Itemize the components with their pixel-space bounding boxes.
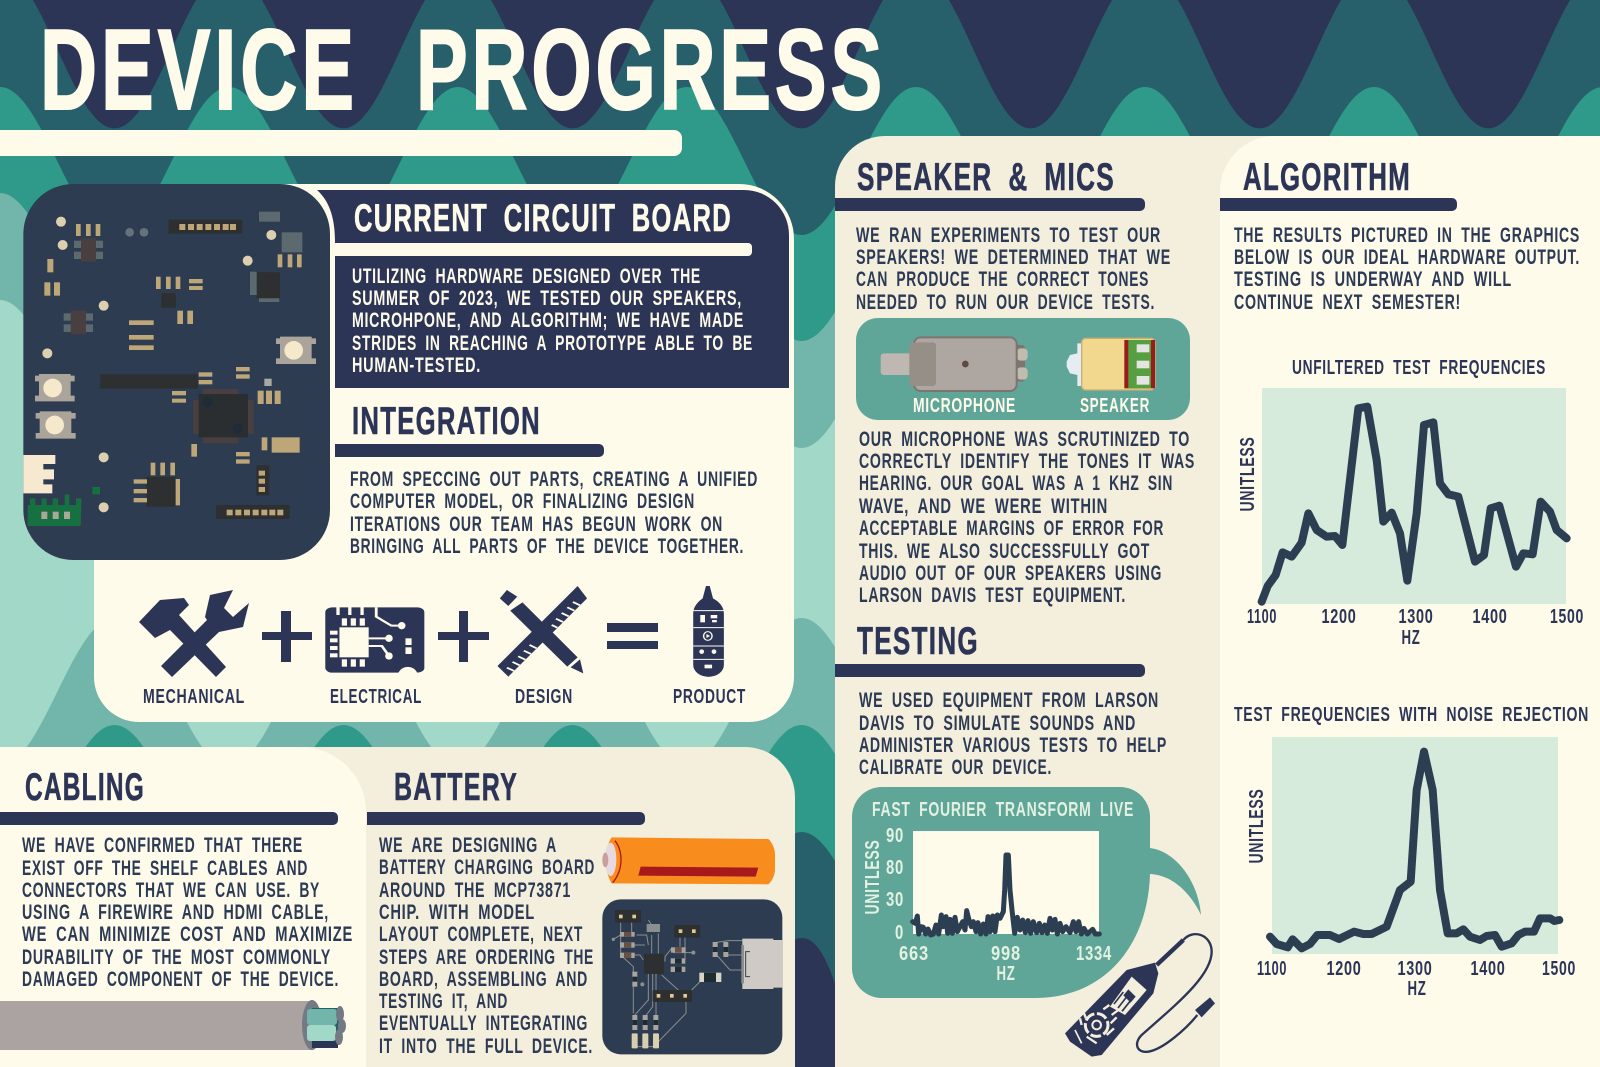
axis labels: HZ <box>996 963 1016 985</box>
circuit board description: SUMMER OF 2023, WE TESTED OUR SPEAKERS, <box>352 287 742 310</box>
testing text: ADMINISTER VARIOUS TESTS TO HELP <box>859 734 1167 757</box>
axis labels: 90 <box>886 825 904 847</box>
testing text: CALIBRATE OUR DEVICE. <box>859 756 1052 779</box>
panel: algorithm <box>1220 136 1600 1067</box>
axis labels: 1500 <box>1542 958 1576 980</box>
cabling text: EXIST OFF THE SHELF CABLES AND <box>22 857 308 880</box>
chart plot area <box>913 831 1099 934</box>
integration text: BRINGING ALL PARTS OF THE DEVICE TOGETHER. <box>350 535 744 558</box>
axis labels <box>862 825 1112 985</box>
icon: cable <box>0 1000 346 1050</box>
title underline bar <box>0 130 682 156</box>
circuit board illustration <box>23 184 330 560</box>
label: design: DESIGN <box>515 686 573 708</box>
battery text: TESTING IT, AND <box>379 990 508 1013</box>
axis labels: UNITLESS <box>1237 436 1259 512</box>
circuit board description: HUMAN-TESTED. <box>352 354 481 377</box>
icon: battery <box>602 837 775 884</box>
axis labels: 80 <box>886 857 904 879</box>
speaker text: NEEDED TO RUN OUR DEVICE TESTS. <box>856 291 1155 314</box>
cabling text: WE HAVE CONFIRMED THAT THERE <box>22 834 303 857</box>
cabling text: USING A FIREWIRE AND HDMI CABLE, <box>22 901 329 924</box>
icon: equals <box>607 623 658 649</box>
icon: microphone <box>881 337 1028 391</box>
axis labels: 998 <box>991 943 1021 965</box>
heading: algorithm: ALGORITHM <box>1243 156 1411 199</box>
microphone text: THIS. WE ALSO SUCCESSFULLY GOT <box>859 540 1150 563</box>
icon: ruler and pencil <box>497 586 587 677</box>
microphone text: ACCEPTABLE MARGINS OF ERROR FOR <box>859 517 1164 540</box>
cabling text: WE CAN MINIMIZE COST AND MAXIMIZE <box>22 923 353 946</box>
testing text <box>859 689 1167 779</box>
circuit board description: STRIDES IN REACHING A PROTOTYPE ABLE TO BE <box>352 332 753 355</box>
battery text: LAYOUT COMPLETE, NEXT <box>379 923 583 946</box>
label: speaker: SPEAKER <box>1080 395 1150 417</box>
cabling text <box>22 834 353 991</box>
speaker text: SPEAKERS! WE DETERMINED THAT WE <box>856 246 1171 269</box>
axis labels: UNITLESS <box>862 840 884 914</box>
axis labels: 1200 <box>1322 606 1356 628</box>
chart title: FAST FOURIER TRANSFORM LIVE <box>872 799 1134 821</box>
integration text: ITERATIONS OUR TEAM HAS BEGUN WORK ON <box>350 513 723 536</box>
connector <box>23 455 55 493</box>
axis labels: 1334 <box>1076 943 1112 965</box>
cabling text: DAMAGED COMPONENT OF THE DEVICE. <box>22 968 339 991</box>
chart: test frequencies with noise rejection <box>1234 704 1589 1000</box>
integration bar <box>335 444 604 457</box>
testing bar <box>835 664 1145 677</box>
battery text: BATTERY CHARGING BOARD <box>379 856 595 879</box>
axis labels: UNITLESS <box>1246 788 1268 864</box>
cabling text: CONNECTORS THAT WE CAN USE. BY <box>22 879 320 902</box>
icon: speaker <box>1067 338 1155 390</box>
plot area <box>1272 737 1558 954</box>
axis labels: 1400 <box>1470 958 1506 980</box>
microphone and speaker box <box>856 318 1190 420</box>
label: electrical: ELECTRICAL <box>330 686 422 708</box>
axis labels <box>1246 788 1576 1000</box>
microphone text: AUDIO OUT OF OUR SPEAKERS USING <box>859 562 1162 585</box>
integration text: FROM SPECCING OUT PARTS, CREATING A UNIFIED <box>350 468 758 491</box>
microphone text: LARSON DAVIS TEST EQUIPMENT. <box>859 584 1126 607</box>
testing text: WE USED EQUIPMENT FROM LARSON <box>859 689 1159 712</box>
icon: product device <box>693 586 724 677</box>
data line <box>1270 752 1559 948</box>
title: DEVICE <box>40 7 358 134</box>
microphone text: HEARING. OUR GOAL WAS A 1 KHZ SIN <box>859 472 1173 495</box>
circuit board description: UTILIZING HARDWARE DESIGNED OVER THE <box>352 265 701 288</box>
panel: cabling <box>0 747 366 1067</box>
chart line <box>913 855 1099 935</box>
speaker text: CAN PRODUCE THE CORRECT TONES <box>856 268 1149 291</box>
battery text: BOARD, ASSEMBLING AND <box>379 968 588 991</box>
plot area <box>1262 388 1566 604</box>
axis labels: 30 <box>886 889 904 911</box>
axis labels <box>1237 436 1584 649</box>
axis labels: 1300 <box>1398 958 1432 980</box>
icon: hammer and wrench <box>139 590 249 677</box>
panel: speaker and mics <box>835 136 1290 1067</box>
icon: sound level meter <box>1065 934 1215 1057</box>
label: mechanical: MECHANICAL <box>143 686 245 708</box>
microphone text: WAVE, AND WE WERE WITHIN <box>859 495 1108 518</box>
axis labels: 1100 <box>1257 958 1287 980</box>
heading: speaker and mics: SPEAKER & MICS <box>857 156 1115 199</box>
title: PROGRESS <box>416 7 886 134</box>
speaker bar <box>835 198 1145 211</box>
circuit board description: MICROHPONE, AND ALGORITHM; WE HAVE MADE <box>352 309 744 332</box>
speaker text <box>856 224 1171 314</box>
circuit board description <box>335 257 789 388</box>
axis labels: 1300 <box>1398 606 1434 628</box>
chart: unfiltered test frequencies <box>1237 357 1584 649</box>
microphone text: CORRECTLY IDENTIFY THE TONES IT WAS <box>859 450 1195 473</box>
heading: current circuit board: CURRENT CIRCUIT BOARD <box>354 197 732 240</box>
algorithm bar <box>1220 198 1457 211</box>
battery bar <box>367 812 645 825</box>
heading: testing: TESTING <box>857 620 979 663</box>
panel: current circuit board and integration <box>94 184 794 722</box>
charging board illustration <box>602 899 782 1054</box>
axis labels: HZ <box>1408 978 1426 1000</box>
cabling bar <box>0 812 338 825</box>
title <box>40 7 886 134</box>
header white bar <box>335 243 752 256</box>
algorithm text: CONTINUE NEXT SEMESTER! <box>1234 291 1461 314</box>
microphone text <box>859 428 1195 607</box>
battery text: WE ARE DESIGNING A <box>379 834 557 857</box>
circuit board header band <box>317 190 789 257</box>
axis labels: 1500 <box>1550 606 1584 628</box>
axis labels: 1100 <box>1247 606 1277 628</box>
axis labels: 0 <box>895 922 904 944</box>
integration text <box>350 468 758 558</box>
battery text: STEPS ARE ORDERING THE <box>379 946 594 969</box>
battery text: AROUND THE MCP73871 <box>379 879 571 902</box>
battery text: EVENTUALLY INTEGRATING <box>379 1012 588 1035</box>
data line <box>1262 407 1567 602</box>
heading: integration: INTEGRATION <box>352 400 541 443</box>
green terminal <box>28 494 81 526</box>
cabling text: DURABILITY OF THE MOST COMMONLY <box>22 946 331 969</box>
heading: battery: BATTERY <box>394 766 518 809</box>
label: product: PRODUCT <box>673 686 746 708</box>
integration text: COMPUTER MODEL, OR FINALIZING DESIGN <box>350 490 695 513</box>
axis labels: 1200 <box>1326 958 1362 980</box>
battery text <box>379 834 595 1058</box>
speaker text: WE RAN EXPERIMENTS TO TEST OUR <box>856 224 1161 247</box>
icon: plus <box>262 611 312 662</box>
axis labels: HZ <box>1402 627 1420 649</box>
battery text: CHIP. WITH MODEL <box>379 901 535 924</box>
panel: battery <box>300 747 795 1067</box>
label: microphone: MICROPHONE <box>913 395 1016 417</box>
icon: circuit board <box>325 603 424 673</box>
icon: plus <box>438 611 489 662</box>
battery text: IT INTO THE FULL DEVICE. <box>379 1035 593 1058</box>
microphone text: OUR MICROPHONE WAS SCRUTINIZED TO <box>859 428 1190 451</box>
callout: fast fourier transform chart <box>852 787 1201 998</box>
buttons <box>35 337 316 439</box>
algorithm text <box>1234 224 1580 314</box>
axis labels: 663 <box>899 943 929 965</box>
axis labels: 1400 <box>1472 606 1508 628</box>
testing text: DAVIS TO SIMULATE SOUNDS AND <box>859 712 1136 735</box>
heading: cabling: CABLING <box>25 766 145 809</box>
